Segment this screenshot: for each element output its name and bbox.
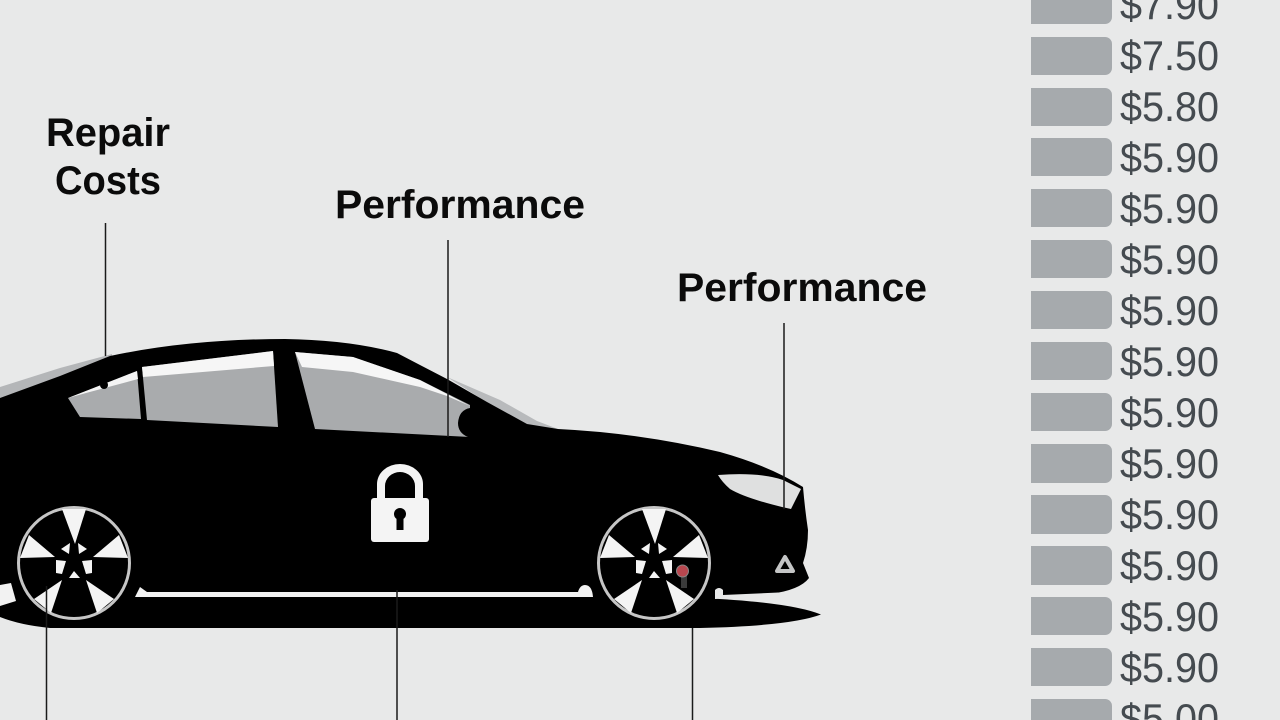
side sill highlight bbox=[135, 585, 593, 597]
price values: $5.90 bbox=[1120, 440, 1219, 487]
label: repair costs bbox=[46, 111, 170, 203]
front sill highlight bbox=[715, 588, 800, 600]
padlock icon bbox=[371, 464, 429, 542]
price bars bbox=[1031, 0, 1112, 720]
ground shadow bbox=[0, 598, 821, 628]
price values: $5.90 bbox=[1120, 491, 1219, 538]
price values: $5.90 bbox=[1120, 236, 1219, 283]
price values: $5.90 bbox=[1120, 134, 1219, 181]
rear wheel bbox=[18, 508, 130, 618]
front window bbox=[295, 352, 475, 437]
middle window bbox=[142, 351, 278, 427]
price column bbox=[1031, 0, 1219, 720]
rear window bbox=[68, 371, 141, 419]
price values: $5.90 bbox=[1120, 185, 1219, 232]
price values: $5.90 bbox=[1120, 389, 1219, 436]
leader lines bbox=[46, 223, 784, 720]
fog light bbox=[777, 557, 793, 571]
price values bbox=[1120, 0, 1219, 720]
price values: $5.90 bbox=[1120, 593, 1219, 640]
car body bbox=[0, 339, 809, 610]
car illustration bbox=[0, 339, 821, 628]
label: repair costs: Repair bbox=[46, 111, 170, 155]
roof highlight bbox=[0, 354, 112, 400]
windshield highlight bbox=[447, 377, 558, 429]
label: performance center: Performance bbox=[335, 183, 585, 227]
label: repair costs: Costs bbox=[55, 159, 161, 203]
rear bumper highlight bbox=[0, 583, 16, 606]
headlight bbox=[718, 474, 801, 509]
price values: $5.80 bbox=[1120, 83, 1219, 130]
front wheel bbox=[598, 508, 710, 618]
price values: $5.90 bbox=[1120, 542, 1219, 589]
price values: $5.90 bbox=[1120, 338, 1219, 385]
price values: $5.90 bbox=[1120, 287, 1219, 334]
label: performance right: Performance bbox=[677, 266, 927, 310]
price values: $5.90 bbox=[1120, 644, 1219, 691]
price values: $7.50 bbox=[1120, 32, 1219, 79]
